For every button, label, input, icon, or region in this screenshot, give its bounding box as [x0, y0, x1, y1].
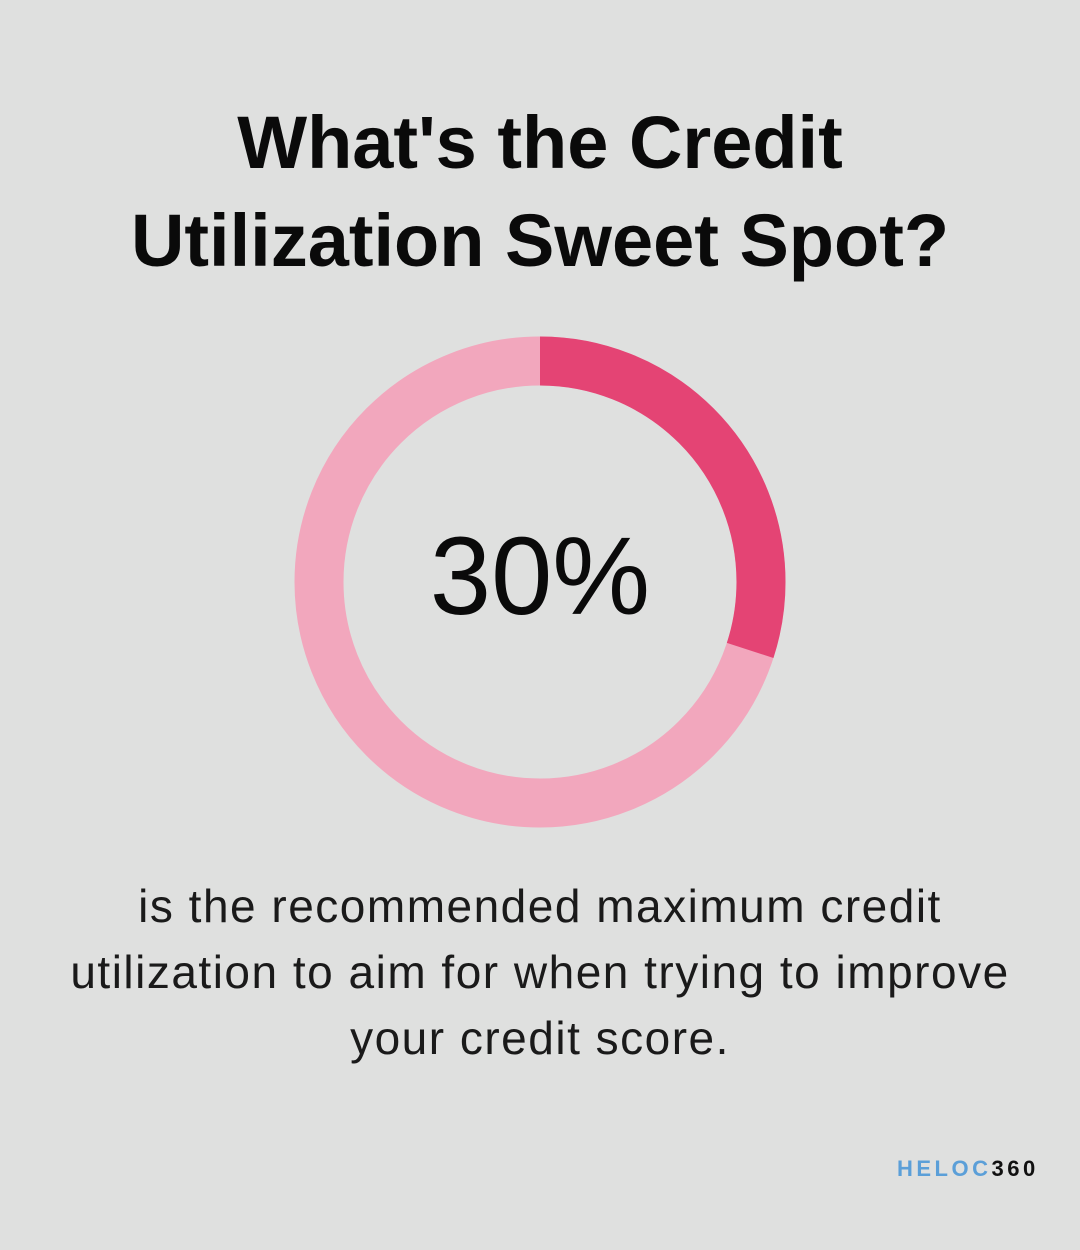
description text: is the recommended maximum credit [138, 880, 942, 932]
title [131, 101, 949, 282]
title: Utilization Sweet Spot? [131, 199, 949, 282]
logo: HELOC360 [897, 1156, 1039, 1181]
donut chart: 30% [430, 515, 650, 638]
description text [70, 880, 1010, 1064]
description text: utilization to aim for when trying to improve [70, 946, 1010, 998]
title: What's the Credit [237, 101, 843, 184]
description text: your credit score. [350, 1012, 730, 1064]
